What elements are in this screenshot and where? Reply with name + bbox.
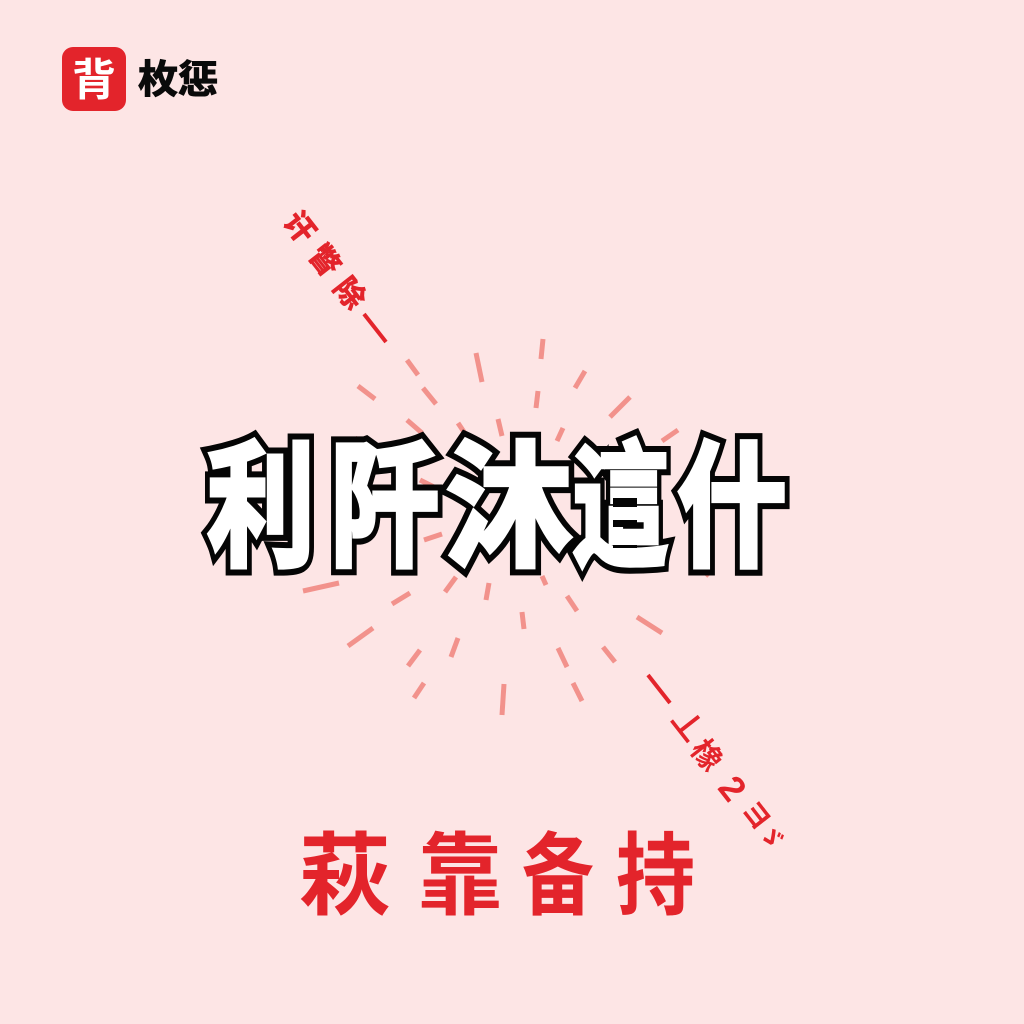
icon: logo badge: 背 (72, 56, 116, 105)
bottom-right diagonal caption (648, 675, 792, 857)
main title (207, 432, 787, 584)
bottom tagline (299, 827, 695, 927)
top-left diagonal caption: 讦 (277, 206, 321, 250)
top-left diagonal caption: 除 (327, 272, 371, 316)
top-left diagonal caption (277, 206, 386, 342)
bottom tagline: 靠 (418, 827, 502, 927)
main title: 阡 (331, 432, 439, 584)
main title: 這 (572, 432, 669, 584)
bottom-right diagonal caption: 橡 (684, 734, 728, 778)
main title: 沐 (446, 432, 572, 584)
main title: 這 (572, 432, 669, 584)
top-left diagonal caption: 瞥 (302, 239, 346, 283)
bottom tagline: 持 (616, 827, 695, 927)
main title: 利 (207, 432, 315, 584)
main title: 什 (677, 432, 787, 584)
main title: 什 (677, 432, 787, 584)
radial burst rays (303, 339, 709, 715)
bottom-right diagonal caption: ゞ (752, 818, 792, 857)
brand name: 枚惩 (138, 59, 218, 102)
main title: 沐 (446, 432, 572, 584)
main title: 利 (207, 432, 315, 584)
bottom-right diagonal caption: 2 (710, 768, 755, 809)
bottom tagline: 萩 (299, 827, 391, 927)
bottom tagline: 备 (522, 827, 594, 927)
bottom-right diagonal caption: ヨ (736, 795, 777, 836)
icon: logo badge (62, 47, 126, 111)
main title: 阡 (331, 432, 439, 584)
bottom-right diagonal caption: 丄 (665, 704, 709, 748)
logo (62, 47, 218, 111)
